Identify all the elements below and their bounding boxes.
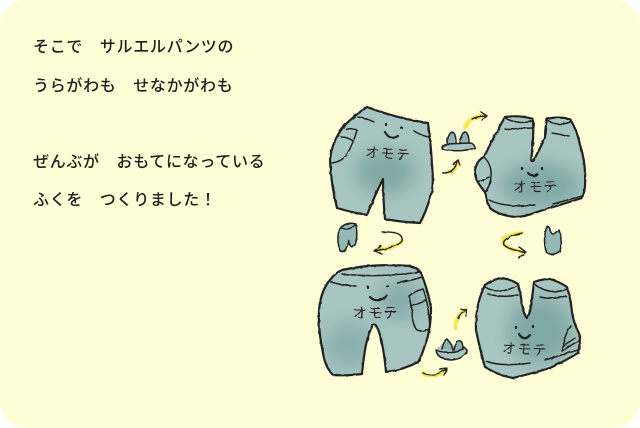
arrow: tray to bottom right pants: [455, 309, 467, 329]
illustration: pants front, bottom left: [319, 265, 431, 375]
pocket: [409, 289, 430, 331]
label: オモテ: [513, 179, 559, 195]
illustration: shoes tray, bottom: [436, 339, 467, 360]
text block: intro: [33, 38, 234, 95]
illustration: leg piece, right: [544, 227, 561, 254]
text block: intro: うらがわも せなかがわも: [33, 76, 233, 95]
arrow: top left pants to tray: [443, 160, 460, 173]
text block: intro: そこで サルエルパンツの: [33, 38, 234, 56]
face: [385, 124, 402, 138]
illustration: leg piece, left: [338, 223, 357, 252]
illustration: pants inside out, bottom right: [476, 278, 580, 378]
label: オモテ: [502, 340, 548, 358]
face: [522, 168, 542, 176]
arrow: top right to bottom right pants: [503, 233, 526, 258]
arrow: bottom right to tray: [423, 368, 447, 376]
arrow: tray to top right pants: [465, 112, 487, 128]
label: オモテ: [353, 305, 399, 321]
face: [368, 286, 388, 300]
illustration: pants inside out, top right: [475, 116, 585, 217]
text block: result: ぜんぶが おもてになっている: [33, 152, 265, 171]
text block: result: [33, 152, 265, 209]
arrow: to bottom left pants: [374, 232, 402, 254]
pocket: [332, 129, 357, 163]
face: [516, 326, 533, 338]
label: オモテ: [365, 144, 411, 163]
illustration: pants front, top left: [330, 107, 433, 223]
illustration: shoes tray, top: [442, 132, 475, 151]
text block: result: ふくを つくりました！: [33, 191, 217, 209]
